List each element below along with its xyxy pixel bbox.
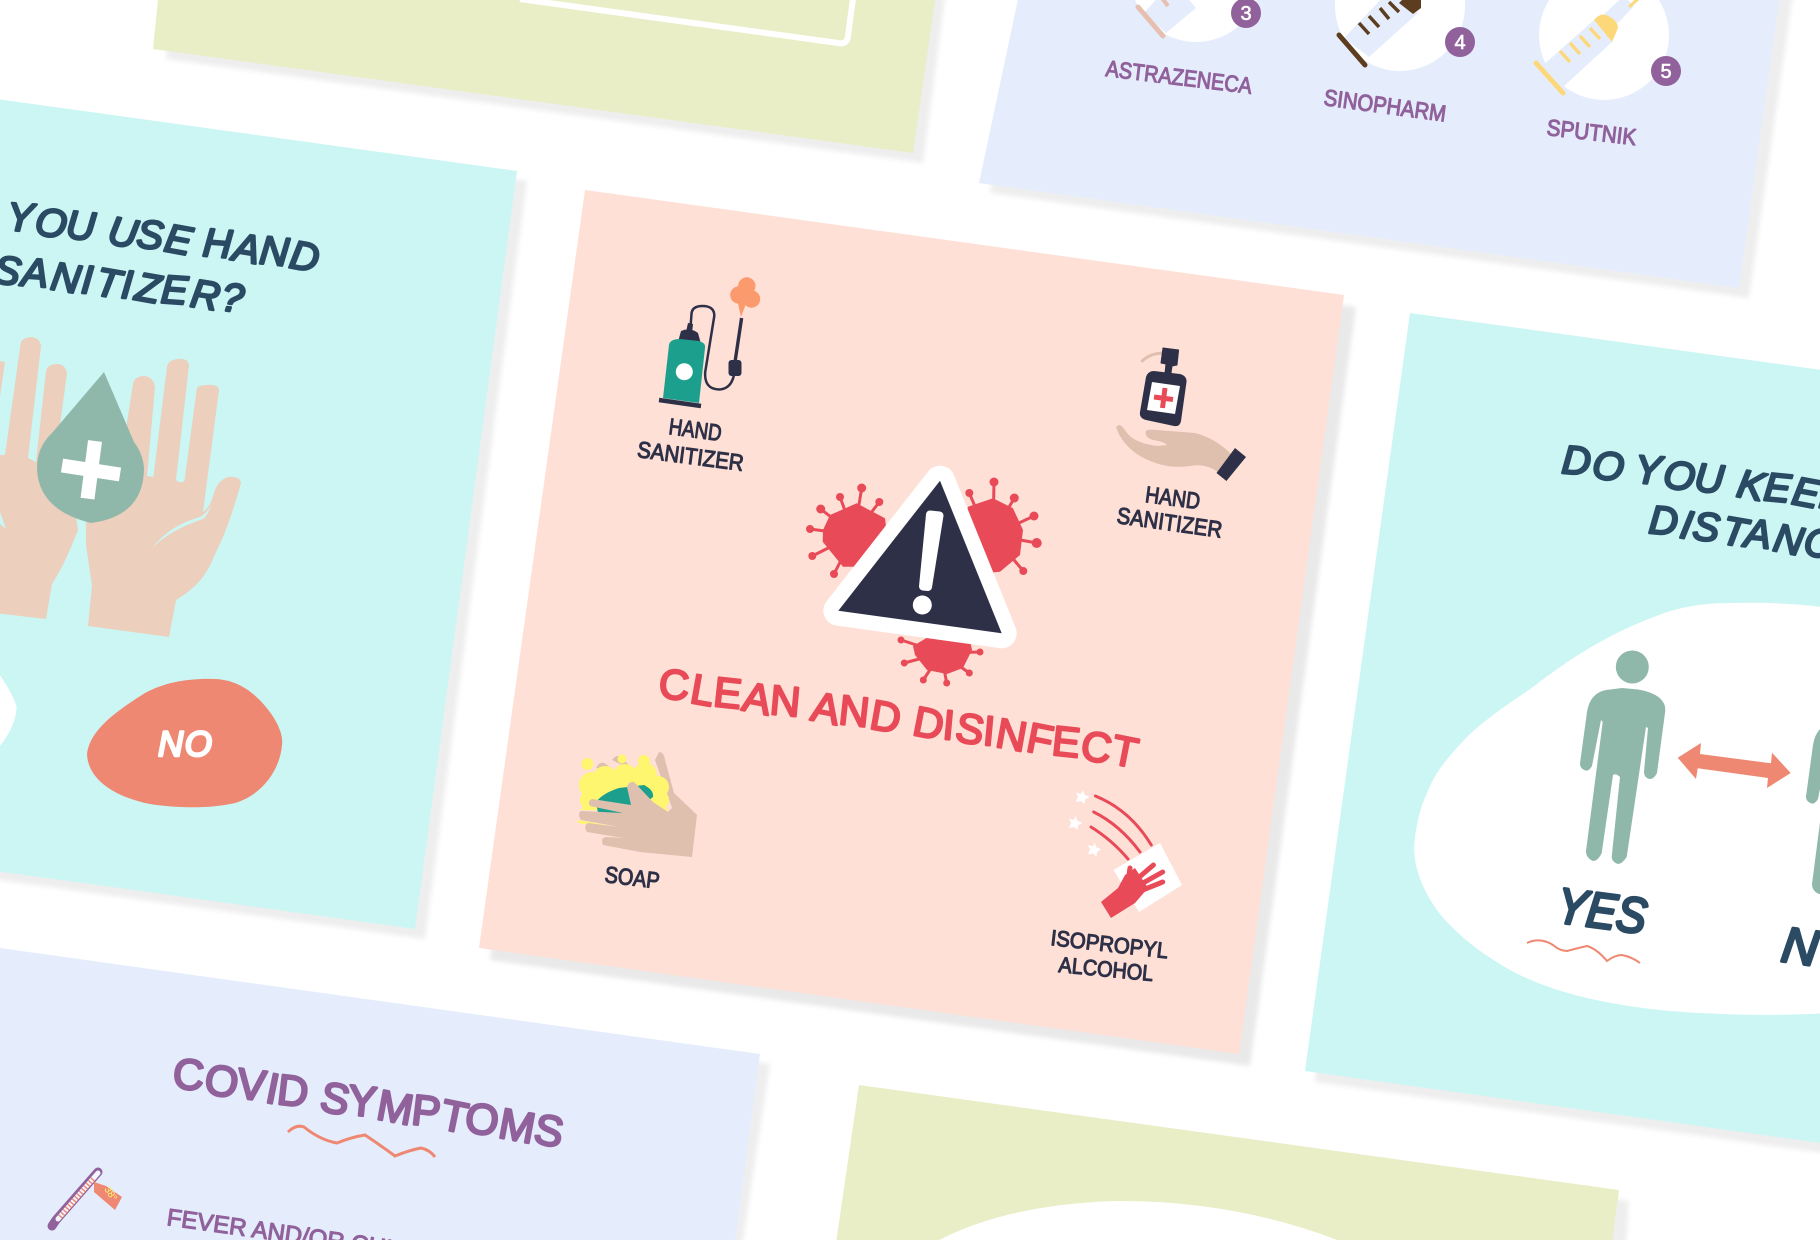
icon: warning triangle — [838, 481, 1002, 633]
icon: sanitizer bottle on hand — [1116, 348, 1246, 481]
label: isopropyl alcohol: ISOPROPYL — [1049, 925, 1170, 963]
panel: bottom blue covid symptoms card — [0, 948, 770, 1240]
panel: top blue vaccines card — [979, 0, 1795, 298]
icon: syringe 4 Sinopharm — [1335, 0, 1465, 71]
icon: virus left — [806, 484, 890, 578]
icon: right hand — [86, 359, 241, 637]
icon: syringe 5 Sputnik — [1536, 0, 1669, 100]
icon: number badge 5 — [1651, 56, 1681, 86]
panel: left cyan hand sanitizer question card — [0, 66, 527, 939]
label: Sinopharm: SINOPHARM — [1322, 84, 1448, 127]
icon: distance arrow — [1678, 743, 1791, 788]
icon: number badge 4 — [1445, 27, 1475, 57]
icon: warning triangle with viruses — [806, 478, 1042, 686]
label: yes: YES — [1554, 877, 1650, 945]
squiggle underline — [288, 1126, 435, 1157]
heading: covid symptoms: COVID SYMPTOMS — [168, 1048, 568, 1158]
label: AstraZeneca: ASTRAZENECA — [1104, 55, 1254, 99]
icon: thermometer — [52, 1172, 122, 1226]
heading: clean and disinfect: CLEAN AND DISINFECT — [654, 658, 1143, 777]
icon: person no — [1806, 721, 1820, 897]
label: Sputnik: SPUTNIK — [1545, 114, 1638, 150]
icon: person yes — [1580, 650, 1665, 864]
label: hand sanitizer left: HAND — [667, 413, 723, 446]
label: isopropyl alcohol: ALCOHOL — [1058, 952, 1154, 986]
icon: alcohol wipe and hand — [1069, 790, 1182, 918]
icon: thermometer: 38° — [101, 1185, 119, 1203]
icon: left hand — [0, 337, 78, 619]
icon: number badge 3: 3 — [1240, 3, 1252, 25]
squiggle underline — [1527, 940, 1640, 963]
panel: center peach clean and disinfect card — [479, 190, 1356, 1066]
label: isopropyl alcohol — [1049, 925, 1170, 986]
label: hand sanitizer left — [636, 413, 745, 476]
icon: soap and hand — [578, 752, 697, 857]
label: soap: SOAP — [603, 861, 661, 894]
panel: bottom green card — [835, 1085, 1629, 1240]
icon: virus bottom — [898, 630, 984, 686]
icon: sanitizer drop with cross — [37, 372, 144, 523]
panel: right cyan keep distance card — [1305, 313, 1820, 1188]
label: hand sanitizer right: SANITIZER — [1115, 502, 1224, 543]
icon: virus right — [960, 478, 1042, 575]
heading: do you use hand sanitizer — [0, 184, 323, 323]
icon: number badge 4: 4 — [1454, 32, 1466, 54]
panel: top green card — [153, 0, 950, 163]
heading: do you keep your distance — [1558, 436, 1820, 577]
icon: sprayer bottle — [659, 277, 760, 406]
white blob — [1414, 603, 1820, 1015]
label: hand sanitizer left: SANITIZER — [636, 436, 745, 476]
icon: syringe 3 AstraZeneca — [1131, 0, 1261, 42]
button: no — [87, 679, 282, 807]
icon: number badge 5: 5 — [1660, 61, 1672, 83]
label: hand sanitizer right — [1115, 481, 1224, 543]
icon: number badge 3 — [1231, 0, 1261, 28]
label: hand sanitizer right: HAND — [1144, 481, 1202, 514]
decorative yes blob edge — [0, 668, 16, 752]
button: no: NO — [158, 725, 212, 764]
